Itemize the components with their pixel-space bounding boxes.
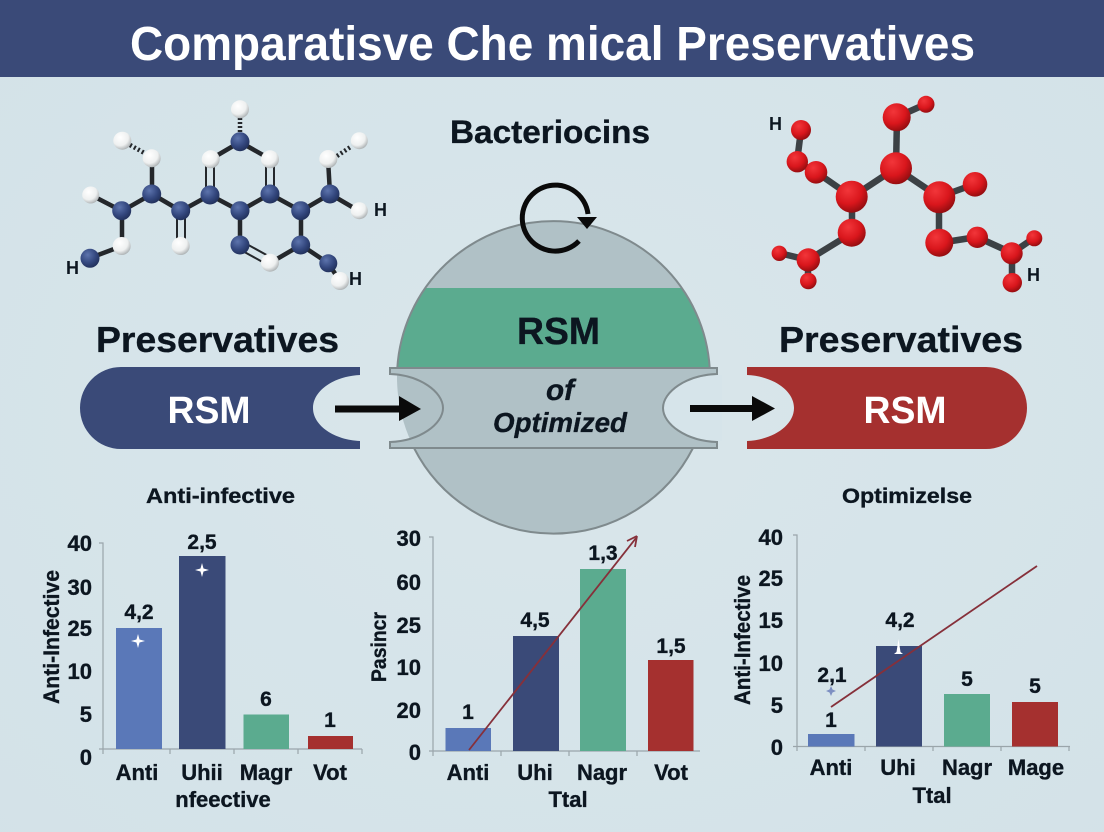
- molecule: red preservative structure: [769, 96, 1042, 292]
- bar chart: right: Uhi: [880, 755, 916, 780]
- bar chart: right: 0: [771, 735, 783, 760]
- bar chart: right: 15: [759, 608, 783, 633]
- bar chart: middle: 0: [409, 740, 421, 765]
- bar chart: left: 5: [80, 702, 92, 727]
- bar chart: middle: 60: [397, 570, 421, 595]
- bar chart: right: 10: [759, 651, 783, 676]
- central vessel diagram: [390, 185, 722, 534]
- heading: Anti-infective chart: Anti-infective: [146, 485, 295, 508]
- molecule: blue and white preservative structure: H: [66, 258, 79, 278]
- bar chart: right: Anti-Infective: [730, 575, 755, 705]
- icon: rotation arrow: [522, 185, 597, 251]
- bar chart: right: Mage: [1008, 755, 1064, 780]
- bar chart: middle: Nagr: [577, 760, 627, 785]
- heading: Bacteriocins: Bacteriocins: [450, 114, 650, 150]
- bar chart: right: 4,2: [885, 609, 915, 632]
- bar chart: left: Uhii: [181, 760, 223, 785]
- optimized connector band: of: [546, 374, 577, 407]
- bar chart: left: 1: [324, 709, 336, 732]
- bar chart: right: 25: [759, 566, 783, 591]
- green RSM band: [397, 288, 710, 368]
- bar chart: left: 0: [80, 745, 92, 770]
- bar chart: middle: 25: [397, 613, 421, 638]
- bar chart: left: 10: [68, 659, 92, 684]
- bar chart: left: nfeective: [175, 787, 271, 812]
- bar chart: middle: 1: [462, 701, 474, 724]
- bar chart: right: 5: [1029, 675, 1041, 698]
- bar chart: middle: 20: [397, 698, 421, 723]
- bar chart: middle: 1,5: [656, 635, 686, 658]
- arrow: into vessel: [335, 396, 421, 421]
- molecule: red preservative structure: H: [1027, 265, 1040, 285]
- bar chart: middle: 4,5: [520, 609, 550, 632]
- vessel sphere: [397, 220, 710, 534]
- bar chart: left: Anti: [116, 760, 158, 785]
- bar chart: right: Anti: [810, 755, 852, 780]
- vessel outline arcs: [397, 221, 710, 534]
- green RSM band: RSM: [517, 311, 600, 353]
- bar chart: left: 2,5: [187, 531, 217, 554]
- bar chart: right: 5: [771, 693, 783, 718]
- bar chart: left: 40: [68, 531, 92, 556]
- bar chart: middle: Pasincr: [368, 612, 391, 682]
- bar chart: left: 25: [68, 616, 92, 641]
- heading: left Preservatives: Preservatives: [96, 319, 339, 360]
- bar chart: left: Anti-Infective: [39, 570, 64, 704]
- molecule: blue and white preservative structure: H: [349, 269, 362, 289]
- bar chart: middle: Vot: [654, 760, 689, 785]
- bar chart: right: 5: [961, 668, 973, 691]
- heading: right Preservatives: Preservatives: [779, 319, 1023, 360]
- bar chart: right: Nagr: [942, 755, 992, 780]
- bar chart: middle: Ttal: [548, 787, 588, 812]
- title banner: [0, 0, 1104, 77]
- pill: right red RSM: [747, 367, 1027, 449]
- bar chart: middle: Uhi: [517, 760, 553, 785]
- bar chart: left: Vot: [313, 760, 348, 785]
- bar chart: left: 4,2: [124, 601, 154, 624]
- pill: left blue RSM: [80, 367, 360, 449]
- bar chart: right: [730, 525, 1070, 808]
- pill: right red RSM: RSM: [864, 390, 946, 432]
- bar chart: right: 1: [825, 709, 837, 732]
- molecule: blue and white preservative structure: H: [374, 200, 387, 220]
- bar chart: left: Magr: [240, 760, 293, 785]
- optimized connector band: Optimized: [493, 407, 628, 438]
- bar chart: right: 2,1: [817, 664, 847, 687]
- bar chart: right: Ttal: [912, 783, 952, 808]
- bar chart: middle: [368, 526, 700, 812]
- bar chart: middle: 10: [397, 655, 421, 680]
- heading: Optimizelse chart: Optimizelse: [842, 485, 972, 508]
- arrow: out of vessel: [690, 396, 775, 421]
- bar chart: right: 40: [759, 525, 783, 550]
- bar chart: left: 30: [68, 575, 92, 600]
- optimized connector band: [390, 368, 722, 448]
- title banner: Comparatisve Che mical Preservatives: [130, 18, 975, 71]
- bar chart: left: 6: [260, 688, 272, 711]
- molecule: red preservative structure: H: [769, 114, 782, 134]
- bar chart: middle: 30: [397, 526, 421, 551]
- pill: left blue RSM: RSM: [168, 390, 250, 432]
- molecule: blue and white preservative structure: [66, 100, 387, 290]
- bar chart: middle: 1,3: [588, 542, 618, 565]
- bar chart: left: [39, 531, 362, 812]
- bar chart: middle: Anti: [447, 760, 489, 785]
